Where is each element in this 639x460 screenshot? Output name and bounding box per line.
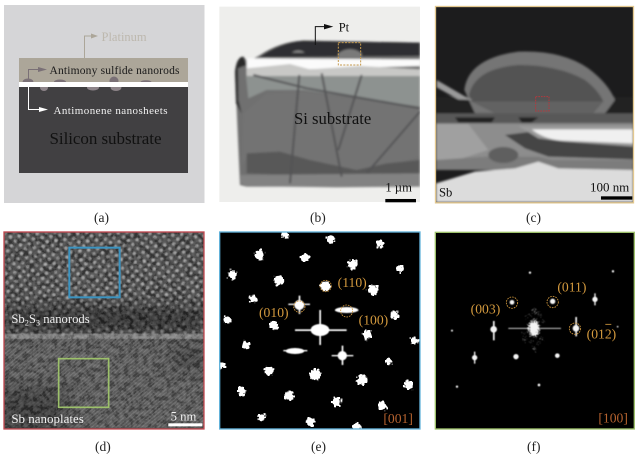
soft shading — [0, 308, 207, 432]
platinum arrow — [84, 36, 92, 58]
scale bar — [385, 199, 416, 202]
tan border — [435, 6, 633, 203]
scale label: 100 nm — [590, 179, 629, 194]
caption e: (e) — [311, 439, 326, 454]
central beam — [523, 309, 544, 350]
label: Sb2S3 nanorods: 2 — [25, 318, 29, 327]
panel e: diffraction pattern — [220, 232, 420, 429]
panel a: schematic — [4, 5, 204, 203]
bright spots with streaks — [283, 296, 358, 365]
nanorods arrow — [28, 70, 40, 80]
label: Sb nanoplates: Sb nanoplates — [11, 411, 84, 426]
panel d: HRTEM — [0, 232, 207, 432]
blue box — [69, 248, 120, 297]
rings around indexed spots — [506, 296, 581, 334]
label: (003): (003) — [471, 301, 500, 317]
label: (010): (010) — [259, 305, 289, 321]
diffraction spots — [451, 270, 618, 388]
scale bar label: 1 µm — [385, 180, 412, 194]
panel b: TEM cross-section — [219, 7, 420, 202]
white gap — [19, 82, 188, 87]
caption f: (f) — [527, 439, 540, 454]
panel c: TEM zoom — [435, 6, 634, 203]
label: (011): (011) — [557, 280, 586, 296]
central beam — [311, 324, 329, 336]
panel f: diffraction pattern — [435, 232, 634, 429]
noise overlay — [5, 232, 204, 428]
nanosheets arrow — [28, 87, 42, 110]
label: Pt: Pt — [339, 21, 350, 35]
caption a: (a) — [94, 210, 109, 225]
label: Sb2S3 nanorods: S — [29, 312, 36, 326]
scale bar — [601, 196, 632, 200]
label: (110): (110) — [338, 275, 367, 291]
green border — [435, 232, 634, 429]
platinum layer — [19, 58, 188, 82]
label: Si substrate: Si substrate — [294, 109, 371, 128]
lower lattice fringes — [5, 337, 204, 428]
label: Antimony sulfide nanorods: Antimony sulfide nanorods — [50, 65, 180, 77]
label: Antimonene nanosheets: Antimonene nanosheets — [54, 105, 168, 117]
label: [001]: [001] — [383, 411, 413, 426]
label: Sb: Sb — [439, 186, 452, 200]
caption d: (d) — [95, 439, 111, 454]
label: (01-2): (012) — [587, 326, 616, 342]
dome — [464, 52, 615, 113]
label: (100): (100) — [359, 312, 388, 328]
label: Sb2S3 nanorods: Sb — [11, 312, 25, 326]
label: Sb2S3 nanorods: nanorods — [40, 312, 90, 326]
silicon substrate block — [19, 87, 188, 173]
scale label: 5 nm — [171, 409, 196, 423]
Pt arrow — [315, 27, 325, 45]
rings around indexed spots — [294, 280, 353, 317]
green box — [59, 359, 109, 407]
red dashed box — [536, 97, 549, 111]
label: Platinum: Platinum — [102, 30, 147, 44]
interface band — [5, 334, 204, 339]
caption b: (b) — [310, 210, 326, 225]
nanorod bumps — [22, 76, 152, 91]
diffraction spots — [221, 233, 417, 429]
caption c: (c) — [526, 210, 541, 225]
blue border — [220, 232, 420, 429]
scale bar — [168, 423, 202, 426]
label: Silicon substrate: Silicon substrate — [50, 129, 162, 148]
dashed box — [338, 43, 361, 65]
red border — [4, 232, 204, 429]
label: [100]: [100] — [598, 410, 628, 425]
label: Sb2S3 nanorods: 3 — [36, 318, 40, 327]
